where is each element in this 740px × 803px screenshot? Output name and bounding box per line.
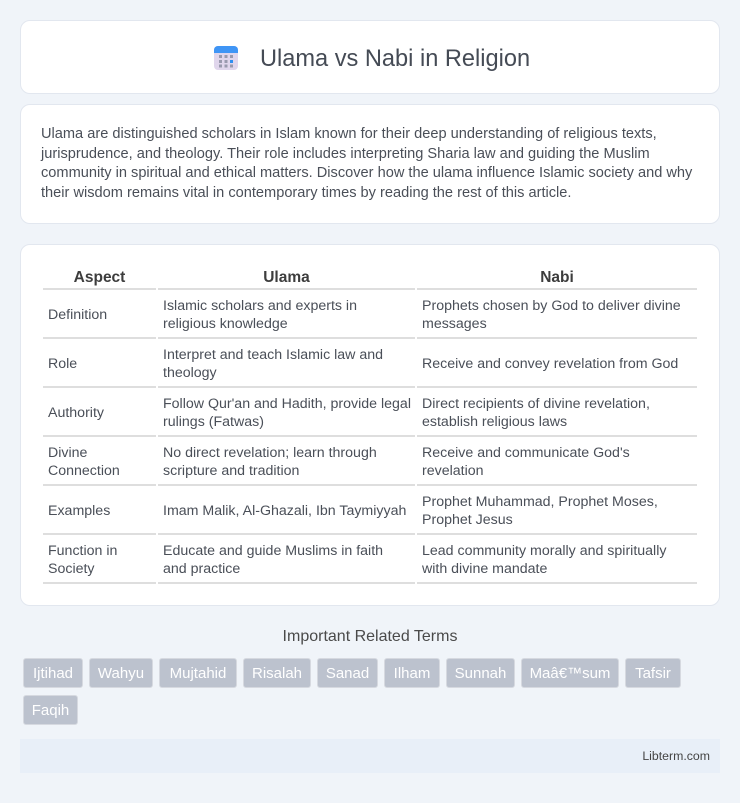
intro text: their wisdom remains vital in contemporary times by reading the rest of this article. — [41, 184, 571, 200]
Nabi authority: Direct recipients of divine revelation, — [422, 396, 650, 412]
Nabi definition: messages — [422, 316, 487, 332]
Nabi definition — [422, 298, 681, 332]
Nabi function: Lead community morally and spiritually — [422, 543, 666, 559]
Ulama examples: Imam Malik, Al-Ghazali, Ibn Taymiyyah — [163, 503, 406, 519]
intro text: jurisprudence, and theology. Their role includes interpreting Sharia law and guiding the Muslim — [41, 146, 650, 162]
Ulama authority: rulings (Fatwas) — [163, 414, 264, 430]
tag: Ilham: Ilham — [394, 665, 430, 682]
Ulama authority — [163, 396, 411, 430]
tag: Ilham — [384, 658, 440, 688]
Nabi authority: establish religious laws — [422, 414, 567, 430]
Ulama function — [163, 543, 383, 577]
Nabi divine connection: Receive and communicate God's — [422, 445, 630, 461]
tag: Sanad: Sanad — [326, 665, 369, 682]
Ulama function: and practice — [163, 561, 240, 577]
tag: Sanad — [317, 658, 378, 688]
tag: Sunnah: Sunnah — [455, 665, 506, 682]
row: Divine Connection — [48, 445, 120, 479]
icon: calendar — [214, 46, 238, 70]
Nabi examples — [422, 494, 658, 528]
Ulama role: Interpret and teach Islamic law and — [163, 347, 383, 363]
tag: Faqih — [23, 695, 78, 725]
tag: Ijtihad — [23, 658, 83, 688]
table header: Nabi: Nabi — [540, 269, 574, 286]
Nabi authority — [422, 396, 650, 430]
tag: Risalah — [243, 658, 311, 688]
Nabi examples: Prophet Jesus — [422, 512, 513, 528]
tag: Tafsir — [625, 658, 681, 688]
tag: Ijtihad: Ijtihad — [33, 665, 73, 682]
row: Divine Connection: Connection — [48, 463, 120, 479]
tag: Faqih: Faqih — [32, 702, 69, 719]
related terms heading: Important Related Terms — [283, 628, 457, 645]
tag: Tafsir: Tafsir — [635, 665, 671, 682]
Ulama divine connection — [163, 445, 377, 479]
Ulama definition: religious knowledge — [163, 316, 288, 332]
Nabi divine connection — [422, 445, 630, 479]
Ulama function: Educate and guide Muslims in faith — [163, 543, 383, 559]
intro panel — [20, 104, 720, 224]
row: Divine Connection: Divine — [48, 445, 87, 461]
tag: Maâ€™sum — [521, 658, 619, 688]
intro text: Ulama are distinguished scholars in Islam known for their deep understanding of religious texts, — [41, 126, 657, 142]
intro text: community in spiritual and ethical matters. Discover how the ulama influence Islamic society and why — [41, 165, 692, 181]
footer credit: Libterm.com — [642, 749, 710, 763]
Nabi role: Receive and convey revelation from God — [422, 356, 678, 372]
Ulama definition — [163, 298, 357, 332]
table header: Ulama: Ulama — [263, 269, 310, 286]
row: Authority: Authority — [48, 405, 104, 421]
Nabi function: with divine mandate — [422, 561, 547, 577]
comparison table panel — [20, 244, 720, 606]
tag: Mujtahid: Mujtahid — [170, 665, 226, 682]
tag: Maâ€™sum: Maâ€™sum — [530, 665, 610, 682]
Ulama divine connection: No direct revelation; learn through — [163, 445, 377, 461]
row: Role: Role — [48, 356, 77, 372]
Ulama divine connection: scripture and tradition — [163, 463, 299, 479]
Nabi divine connection: revelation — [422, 463, 484, 479]
tag: Wahyu — [89, 658, 153, 688]
Nabi function — [422, 543, 666, 577]
Ulama role — [163, 347, 383, 381]
Nabi definition: Prophets chosen by God to deliver divine — [422, 298, 681, 314]
row: Definition: Definition — [48, 307, 107, 323]
row: Function in Society — [48, 543, 117, 577]
tag: Sunnah — [446, 658, 515, 688]
row: Function in Society: Society — [48, 561, 95, 577]
table header: Aspect: Aspect — [74, 269, 125, 286]
row: Examples: Examples — [48, 503, 110, 519]
Nabi examples: Prophet Muhammad, Prophet Moses, — [422, 494, 658, 510]
intro text — [40, 126, 692, 200]
tag: Risalah: Risalah — [252, 665, 302, 682]
footer bar — [20, 739, 720, 773]
tag: Wahyu: Wahyu — [98, 665, 144, 682]
Ulama authority: Follow Qur'an and Hadith, provide legal — [163, 396, 411, 412]
Ulama role: theology — [163, 365, 217, 381]
Ulama definition: Islamic scholars and experts in — [163, 298, 357, 314]
row: Function in Society: Function in — [48, 543, 117, 559]
title: Ulama vs Nabi in Religion — [260, 46, 530, 72]
header panel — [20, 20, 720, 94]
tag: Mujtahid — [159, 658, 237, 688]
